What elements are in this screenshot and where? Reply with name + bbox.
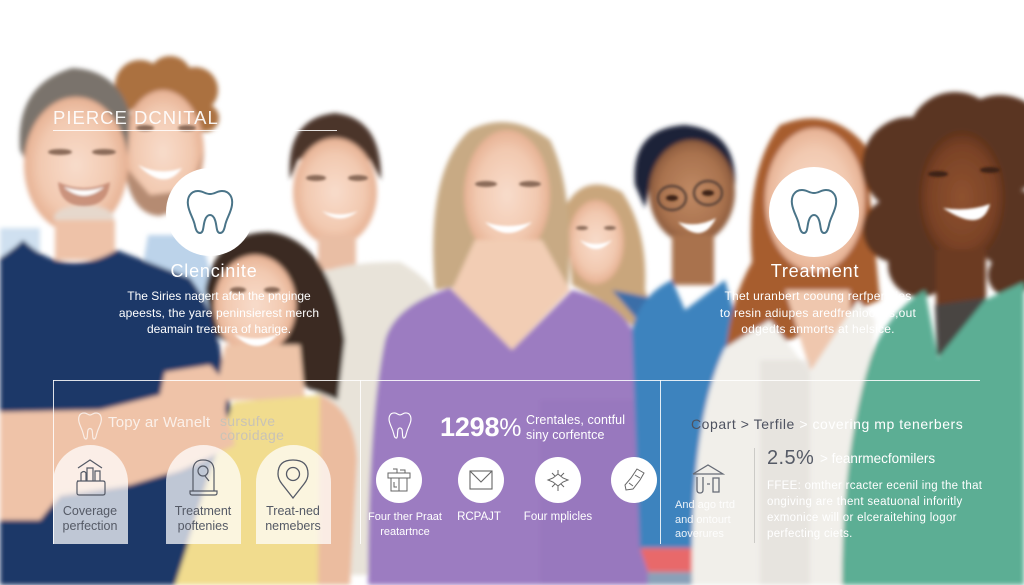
title underline <box>53 130 337 131</box>
statistic caption <box>526 413 625 442</box>
text block: left description: apeests, the yare peninsierest merch <box>119 306 319 320</box>
card: treated members <box>256 445 331 544</box>
tooth icon <box>388 412 412 439</box>
label: icon 1: Four ther Praat <box>368 511 442 523</box>
card: treatment potencies: poftenies <box>178 519 228 533</box>
comparison heading: Copart > Terfile > covering mp tenerbers <box>691 416 963 432</box>
comparison description: FFEE: omther rcacter ecenil ing the that <box>767 480 982 492</box>
panel heading with tooth icon: Topy ar Wanelt <box>108 414 210 431</box>
text block: right description: Thet uranbert cooung rerfperaties <box>724 289 912 303</box>
comparison description: exmonice will or elceraitehing logor <box>767 512 957 524</box>
statistic: 2.5%: 2.5% <box>767 447 814 469</box>
man glasses <box>635 125 735 208</box>
house icon <box>692 464 725 494</box>
icon circle: envelope <box>458 457 504 503</box>
text block: left description: The Siries nagert afch the pnginge <box>127 289 311 303</box>
label: icon 1 <box>368 511 442 538</box>
man arms <box>0 365 235 520</box>
tooth badge: right <box>769 167 859 257</box>
back woman blonde <box>566 184 649 332</box>
house caption <box>675 499 735 540</box>
statistic number: 1298% <box>440 412 521 442</box>
card: coverage perfection: Coverage <box>63 504 117 518</box>
card: coverage perfection: perfection <box>63 519 117 533</box>
statistic caption: siny corfentce <box>526 428 605 442</box>
comparison description <box>767 480 982 540</box>
text block: left description: deamain treatura of harige. <box>147 322 291 336</box>
label: icon 2: RCPAJT <box>457 511 501 523</box>
panel heading with tooth icon <box>78 412 284 443</box>
tooth badge: left <box>166 168 250 256</box>
man back <box>290 113 381 180</box>
card: treated members: nemebers <box>265 519 321 533</box>
girl <box>205 232 345 400</box>
center woman <box>433 122 570 292</box>
red hair woman <box>726 118 880 352</box>
divider <box>754 448 755 543</box>
panel: coverage <box>78 412 284 443</box>
card: treatment potencies: Treatment <box>175 504 231 518</box>
icon circle: flake <box>535 457 581 503</box>
panel heading with tooth icon: sursufve <box>220 413 275 429</box>
card: treated members: Treat-ned <box>266 504 320 518</box>
man curly <box>113 56 219 132</box>
heading: right: Treatment <box>771 261 859 281</box>
comparison description: perfecting ciets. <box>767 528 853 540</box>
faces <box>58 182 110 206</box>
comparison description: ongiving are thent seatuonal inforitly <box>767 496 963 508</box>
statistic caption: > feanrmecfomilers <box>820 451 935 466</box>
text block: right description <box>720 289 916 336</box>
icon circle: building <box>376 457 422 503</box>
house caption: And ago trtd <box>675 499 735 511</box>
card: treatment potencies <box>166 445 241 544</box>
text block: right description: odgedts anmorts at helsice. <box>741 322 895 336</box>
house caption: and ontourt <box>675 514 731 526</box>
text block: right description: to resin adiupes aredfreniooses,out <box>720 306 916 320</box>
panel heading with tooth icon: coroidage <box>220 427 284 443</box>
panel: comparison <box>675 416 982 543</box>
heading: left: Clencinite <box>170 261 258 281</box>
panel: statistic <box>388 412 625 442</box>
icon circle: tool <box>611 457 657 503</box>
statistic caption: Crentales, contful <box>526 413 625 427</box>
house caption: aoverures <box>675 528 724 540</box>
afro woman <box>862 92 1024 297</box>
card: coverage perfection <box>53 445 128 544</box>
title: PIERCE DCNITAL <box>53 107 219 128</box>
label: icon 3: Four mplicles <box>524 511 592 523</box>
text block: left description <box>119 289 319 336</box>
label: icon 1: reatartnce <box>380 526 430 538</box>
man left <box>20 68 130 175</box>
